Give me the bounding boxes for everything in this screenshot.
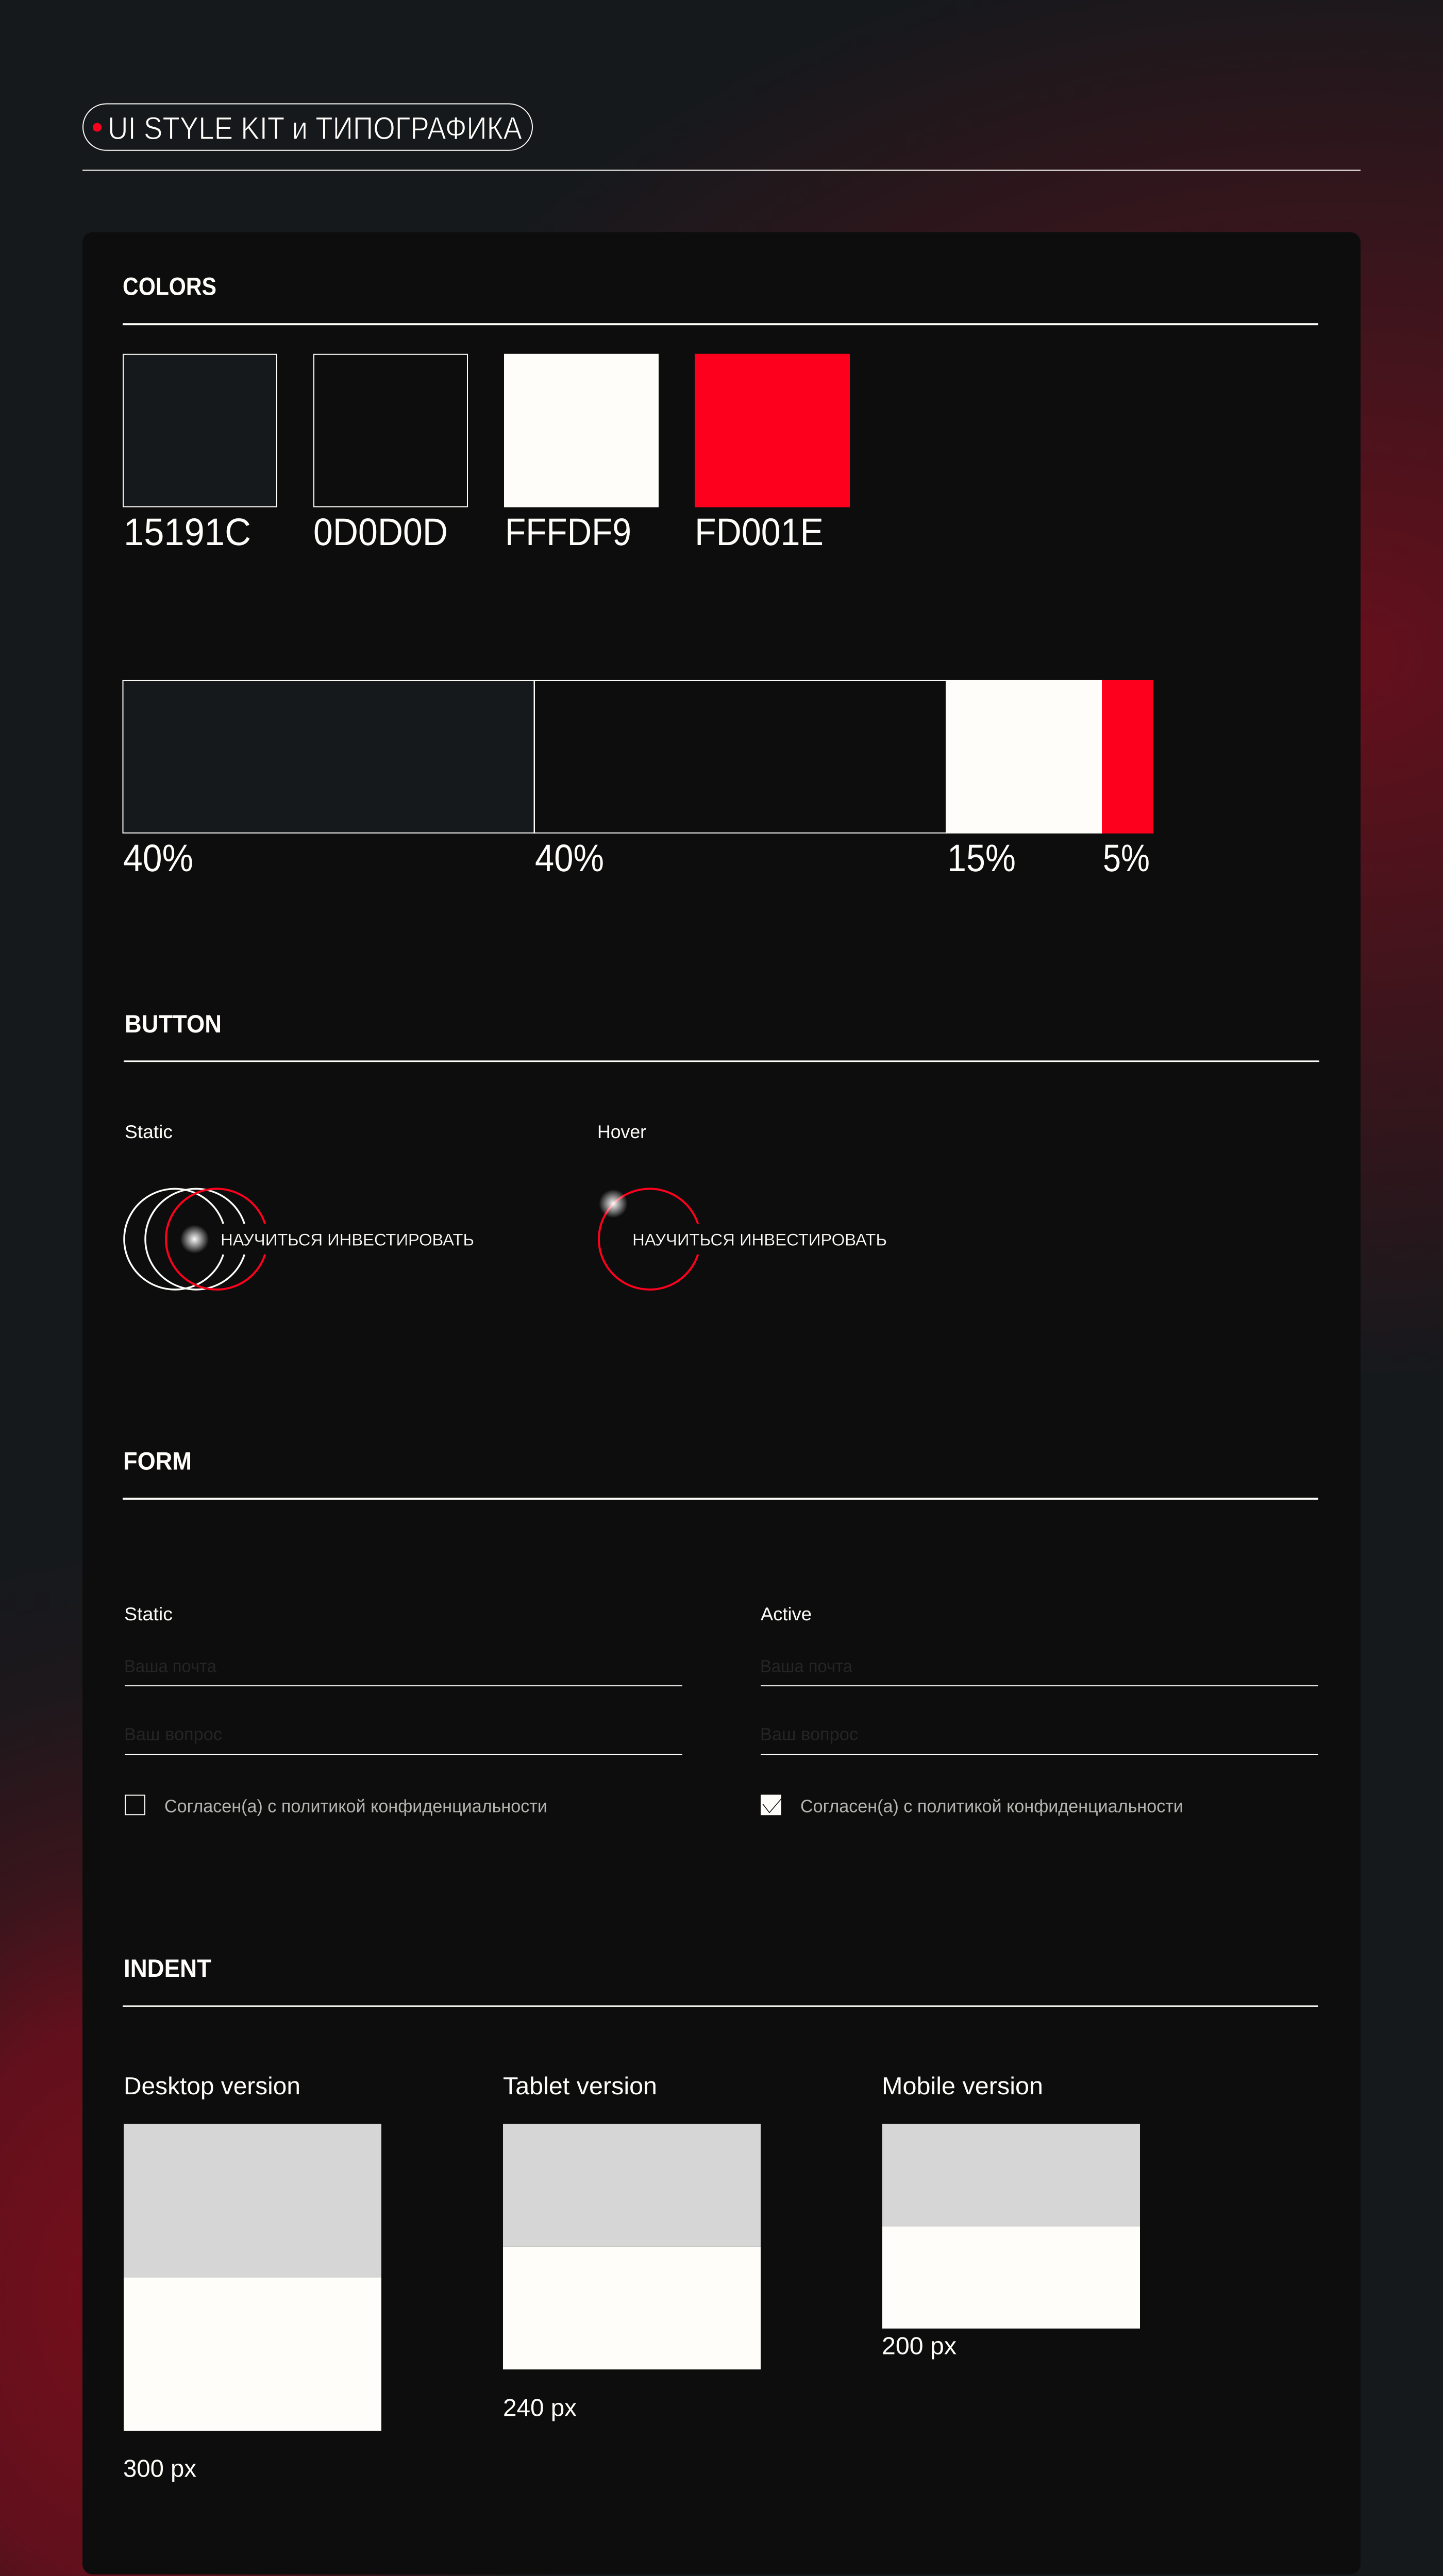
button hover state bbox=[597, 1121, 887, 1290]
form active state bbox=[760, 1603, 1318, 1816]
colour proportion bar: 5% bbox=[1103, 837, 1150, 879]
button static state: НАУЧИТЬСЯ ИНВЕСТИРОВАТЬ bbox=[221, 1230, 474, 1249]
section: colors bbox=[123, 273, 1318, 879]
form active state: Согласен(а) с политикой конфиденциальности bbox=[800, 1797, 1183, 1816]
desktop indent sample: 300 px bbox=[123, 2455, 196, 2482]
heading: button: BUTTON bbox=[125, 1010, 222, 1038]
colour proportion bar: 15% bbox=[947, 837, 1016, 879]
colour proportion bar: 40% bbox=[535, 837, 604, 879]
title divider bbox=[82, 170, 1361, 171]
heading: indent: INDENT bbox=[124, 1955, 211, 1982]
section: form bbox=[123, 1448, 1318, 1816]
form static state: Ваш вопрос bbox=[124, 1725, 222, 1744]
section: button bbox=[124, 1010, 1319, 1290]
swatch: FD001E: FD001E bbox=[695, 510, 824, 553]
swatch: 15191C: 15191C bbox=[124, 510, 251, 553]
mobile indent sample: 200 px bbox=[882, 2333, 957, 2360]
colour proportion bar: 40% bbox=[123, 837, 193, 879]
form static state: Ваша почта bbox=[124, 1657, 216, 1676]
form static state: Static bbox=[124, 1603, 173, 1624]
swatch: 0D0D0D: 0D0D0D bbox=[313, 510, 448, 553]
title pill bbox=[83, 104, 532, 150]
heading: form: FORM bbox=[123, 1448, 192, 1475]
tablet indent sample: Tablet version bbox=[503, 2073, 657, 2100]
button hover state: НАУЧИТЬСЯ ИНВЕСТИРОВАТЬ bbox=[632, 1230, 887, 1249]
swatch: FFFDF9: FFFDF9 bbox=[505, 510, 631, 553]
tablet indent sample: 240 px bbox=[503, 2395, 577, 2421]
colour proportion bar bbox=[123, 680, 1153, 879]
heading: colors: COLORS bbox=[123, 273, 216, 301]
mobile indent sample bbox=[882, 2073, 1140, 2360]
form static state bbox=[124, 1603, 682, 1816]
form active state: Ваша почта bbox=[760, 1657, 852, 1676]
form static state: Согласен(а) с политикой конфиденциальности bbox=[164, 1797, 547, 1816]
tablet indent sample bbox=[503, 2073, 761, 2421]
button static state bbox=[124, 1121, 474, 1290]
button hover state: Hover bbox=[597, 1121, 646, 1142]
desktop indent sample bbox=[123, 2073, 381, 2482]
mobile indent sample: Mobile version bbox=[882, 2073, 1043, 2100]
section: indent bbox=[123, 1955, 1318, 2482]
swatch: 15191C bbox=[123, 354, 277, 553]
swatch: FD001E bbox=[695, 354, 850, 553]
swatch: FFFDF9 bbox=[504, 354, 659, 553]
form active state: Active bbox=[761, 1603, 812, 1624]
form active state: Ваш вопрос bbox=[760, 1725, 858, 1744]
desktop indent sample: Desktop version bbox=[124, 2073, 300, 2100]
swatch: 0D0D0D bbox=[313, 354, 467, 553]
title pill: UI STYLE KIT и ТИПОГРАФИКА bbox=[108, 111, 523, 146]
button static state: Static bbox=[125, 1121, 173, 1142]
